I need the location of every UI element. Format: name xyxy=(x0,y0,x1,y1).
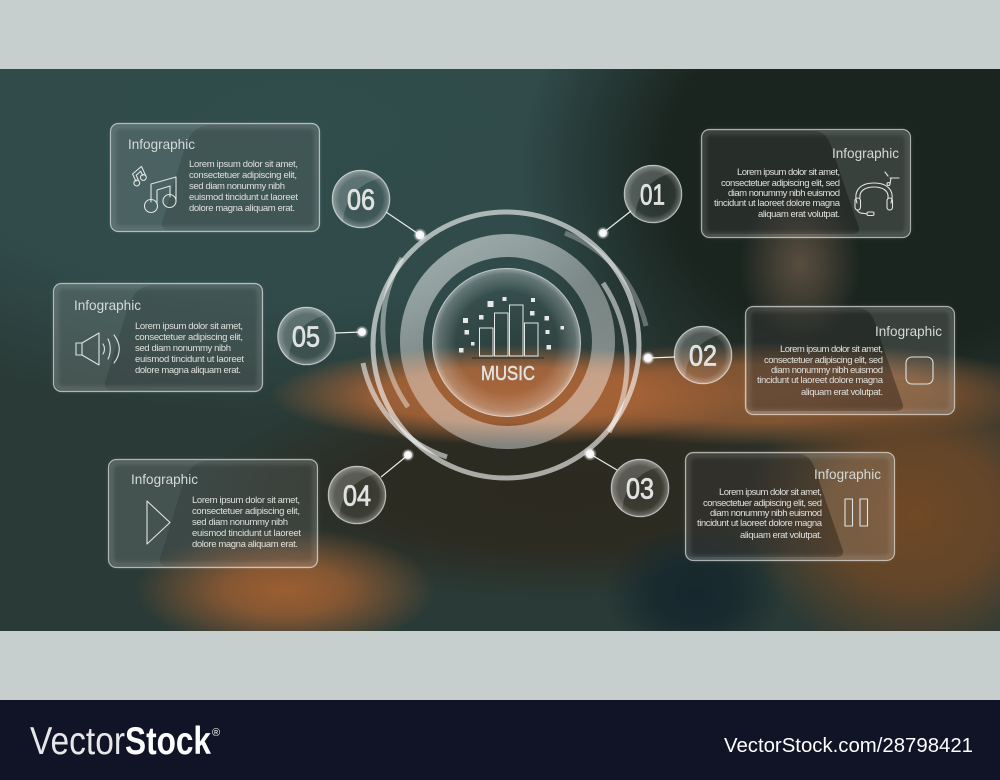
panel 01: tincidunt ut laoreet dolore magna xyxy=(714,198,841,209)
panel 06: Lorem ipsum dolor sit amet, xyxy=(189,159,298,170)
icon: stop xyxy=(906,357,933,384)
panel 05: consectetuer adipiscing elit, xyxy=(135,332,243,343)
badge 04 xyxy=(328,466,386,524)
panel 06: euismod tincidunt ut laoreet xyxy=(189,192,298,203)
panel 05: euismod tincidunt ut laoreet xyxy=(135,354,244,365)
panel 05: Lorem ipsum dolor sit amet, xyxy=(135,321,243,332)
panel 03: tincidunt ut laoreet dolore magna xyxy=(697,518,823,529)
icon: music notes xyxy=(129,166,176,212)
thick glass ring xyxy=(412,246,604,438)
panel 04: dolore magna aliquam erat. xyxy=(192,539,298,550)
panel 02: diam nonummy nibh euismod xyxy=(771,365,883,376)
icon: pause xyxy=(845,499,868,526)
outer ring xyxy=(373,212,639,478)
panel 05 xyxy=(53,283,263,392)
blurred photographic background xyxy=(0,69,1000,631)
panel 06: Infographic xyxy=(128,136,195,152)
badge 02 xyxy=(674,326,732,384)
panel 03: Lorem ipsum dolor sit amet, xyxy=(719,487,822,498)
panel 01: Infographic xyxy=(832,145,899,161)
top band xyxy=(0,0,1000,69)
badge 05 xyxy=(278,307,336,365)
badge 01 xyxy=(624,165,682,223)
panel 02 xyxy=(745,306,955,415)
icon: play xyxy=(147,501,170,544)
panel 06: sed diam nonummy nibh xyxy=(189,181,285,192)
image id: VectorStock.com/28798421 xyxy=(724,735,973,757)
equalizer bars icon xyxy=(459,297,564,358)
footer bar: ® xyxy=(212,727,220,739)
panel 02: tincidunt ut laoreet dolore magna xyxy=(757,375,884,386)
badge 05: 05 xyxy=(292,322,320,354)
badge 04: 04 xyxy=(343,480,371,512)
icon: headphones xyxy=(855,172,899,216)
panel 02: aliquam erat volutpat. xyxy=(801,387,883,398)
panel 04 xyxy=(108,459,318,568)
panel 01: consectetuer adipiscing elit, sed xyxy=(721,178,840,189)
panel 01: Lorem ipsum dolor sit amet, xyxy=(737,167,840,178)
panel 04: euismod tincidunt ut laoreet xyxy=(192,528,301,539)
panel 05: sed diam nonummy nibh xyxy=(135,343,231,354)
badge 02: 02 xyxy=(689,340,717,372)
panel 05: dolore magna aliquam erat. xyxy=(135,365,241,376)
panel 01: aliquam erat volutpat. xyxy=(758,209,840,220)
inner glass sphere xyxy=(432,268,581,417)
panel 06: consectetuer adipiscing elit, xyxy=(189,170,297,181)
panel 03: consectetuer adipiscing elit, sed xyxy=(703,498,822,509)
panel 02: consectetuer adipiscing elit, sed xyxy=(764,355,883,366)
music label: MUSIC xyxy=(481,363,535,385)
badge 03 xyxy=(611,459,669,517)
panel 01 xyxy=(701,129,911,238)
footer bar xyxy=(0,700,1000,780)
panel 02: Lorem ipsum dolor sit amet, xyxy=(780,344,883,355)
central hub: music xyxy=(363,212,646,478)
connector dots xyxy=(356,227,654,461)
panel 03: Infographic xyxy=(814,466,881,482)
panel 02: Infographic xyxy=(875,323,942,339)
arc segments xyxy=(363,233,646,457)
icon: speaker xyxy=(76,333,119,365)
badge 01: 01 xyxy=(640,180,665,212)
panel 06 xyxy=(110,123,320,232)
panel 04: Infographic xyxy=(131,471,198,487)
panel 03: diam nonummy nibh euismod xyxy=(710,508,822,519)
badge 03: 03 xyxy=(626,474,654,506)
panel 04: sed diam nonummy nibh xyxy=(192,517,288,528)
panel 04: Lorem ipsum dolor sit amet, xyxy=(192,495,300,506)
logo: Stock xyxy=(125,720,211,763)
panel 03: aliquam erat volutpat. xyxy=(740,530,822,541)
logo: Vector xyxy=(30,720,125,763)
panel 05: Infographic xyxy=(74,297,141,313)
panel 01: diam nonummy nibh euismod xyxy=(728,188,840,199)
badge 06 xyxy=(332,170,390,228)
panel 04: consectetuer adipiscing elit, xyxy=(192,506,300,517)
bottom light band xyxy=(0,631,1000,700)
panel 06: dolore magna aliquam erat. xyxy=(189,203,295,214)
panel 03 xyxy=(685,452,895,561)
badge 06: 06 xyxy=(347,184,375,216)
connector lines xyxy=(335,211,675,477)
